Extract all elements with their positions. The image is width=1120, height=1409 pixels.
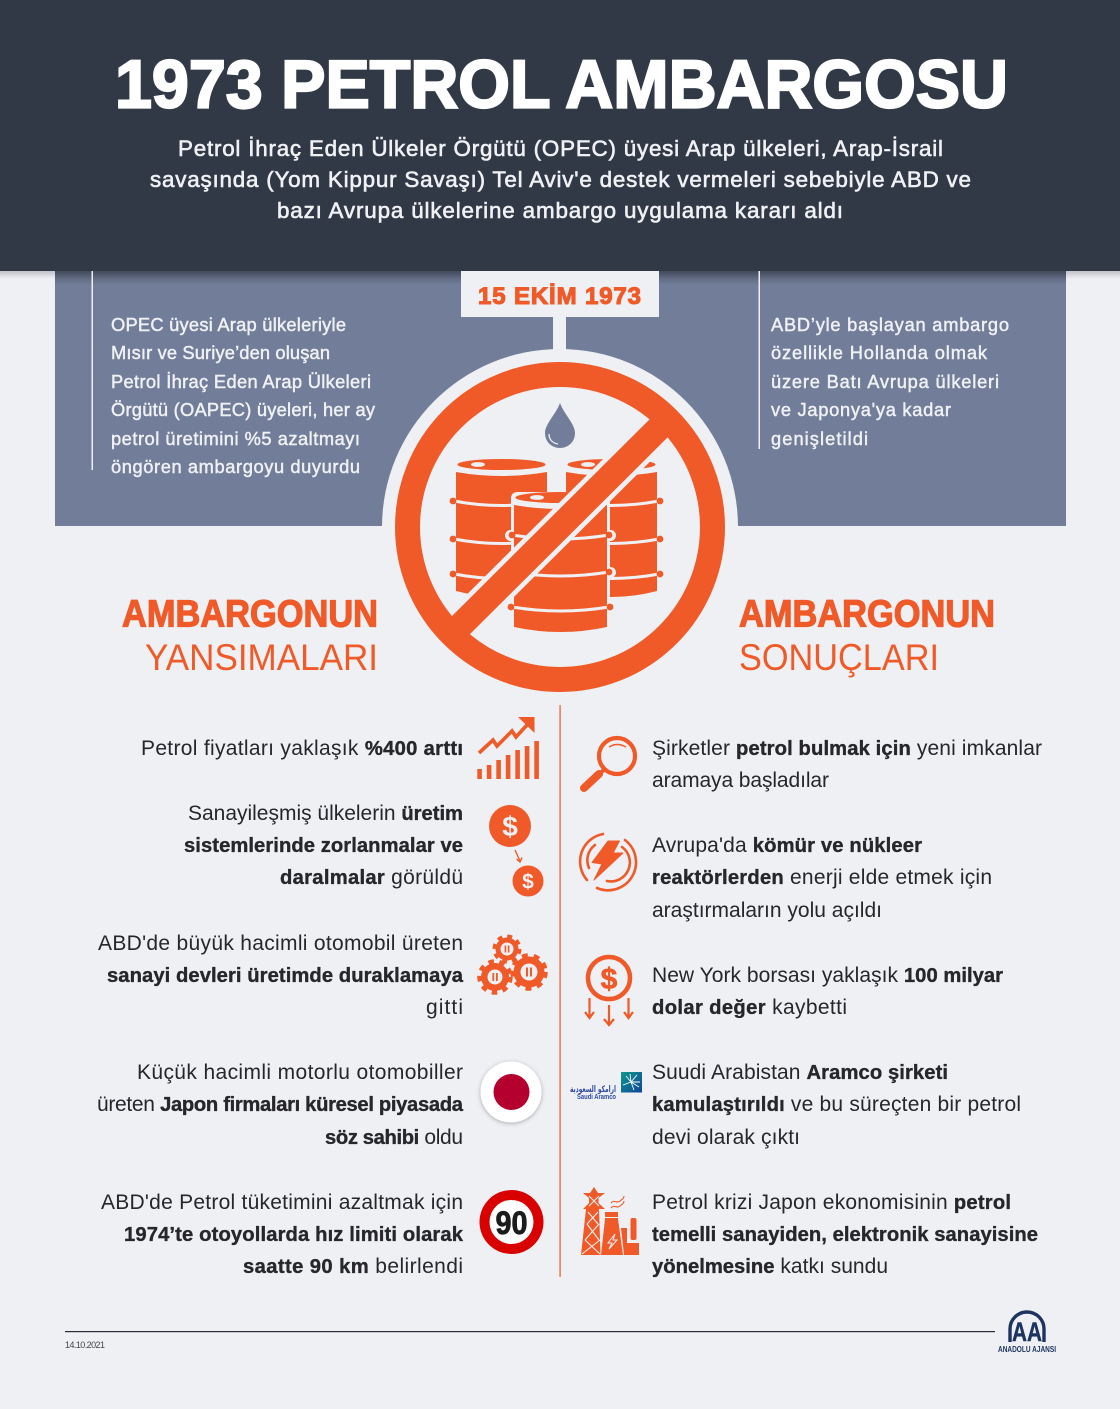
icon: paused gears [480, 937, 545, 992]
left intro text block: Örgütü (OAPEC) üyeleri, her ay [111, 399, 376, 420]
left intro text block: OPEC üyesi Arap ülkeleriyle [111, 314, 346, 335]
left column text: saatte 90 km belirlendi [243, 1255, 463, 1278]
logo: Saudi Aramco [570, 1072, 642, 1101]
right column text: reaktörlerden enerji elde etmek için [652, 866, 992, 889]
prohibition sign [408, 374, 712, 680]
right column text: Şirketler petrol bulmak için yeni imkanlar [652, 737, 1042, 760]
right intro text block: özellikle Hollanda olmak [771, 342, 988, 363]
icon: dollar with falling arrows [585, 957, 633, 1025]
right column text: kamulaştırıldı ve bu süreçten bir petrol [652, 1093, 1021, 1116]
icon: oil drop [545, 403, 575, 448]
left column text: 1974’te otoyollarda hız limiti olarak [124, 1224, 464, 1246]
left intro text block [92, 271, 376, 477]
icon: Japan flag [480, 1062, 542, 1122]
barrel: right [564, 459, 663, 597]
icon: 90 km speed limit: 90 [496, 1205, 528, 1241]
header description: Petrol İhraç Eden Ülkeler Örgütü (OPEC) üyesi Arap ülkeleri, Arap-İsrail [178, 136, 943, 161]
heading: results: AMBARGONUN [739, 594, 995, 636]
heading: results: SONUÇLARI [739, 637, 939, 678]
left column text: ABD'de Petrol tüketimini azaltmak için [101, 1191, 463, 1214]
icon: banned oil barrels [408, 374, 712, 680]
right column text: New York borsası yaklaşık 100 milyar [652, 964, 1003, 987]
right intro text block: üzere Batı Avrupa ülkeleri [771, 371, 999, 392]
right column text: araştırmaların yolu açıldı [652, 899, 882, 922]
right column text: temelli sanayiden, elektronik sanayisine [652, 1224, 1038, 1246]
right column text: dolar değer kaybetti [652, 996, 847, 1019]
right intro text block [758, 271, 1009, 449]
date: 14.10.2021 [65, 1340, 105, 1350]
header description [150, 136, 971, 223]
icon: dollar with falling arrows: $ [601, 963, 618, 996]
icon: 90 km speed limit [480, 1190, 544, 1254]
right intro text block: ABD’yle başlayan ambargo [771, 314, 1009, 335]
logo: Anadolu Ajansı [998, 1312, 1056, 1354]
heading: reflections: AMBARGONUN [122, 594, 378, 636]
barrel: left [450, 459, 549, 597]
logo: Saudi Aramco: Saudi Aramco [577, 1094, 616, 1101]
icon: falling dollar [489, 805, 544, 896]
icon: power plant [581, 1187, 639, 1255]
header description: bazı Avrupa ülkelerine ambargo uygulama kararı aldı [277, 198, 843, 223]
right intro text block: ve Japonya'ya kadar [771, 399, 951, 420]
heading: reflections [122, 594, 378, 678]
heading: reflections: YANSIMALARI [145, 637, 378, 678]
left intro text block: petrol üretimini %5 azaltmayı [111, 428, 360, 449]
left column text: sanayi devleri üretimde duraklamaya [107, 965, 464, 987]
left intro text block: öngören ambargoyu duyurdu [111, 456, 360, 477]
panel: upper grey-blue band [0, 271, 1120, 526]
icon: energy bolt [580, 834, 636, 890]
date label: 15 EKİM 1973 [478, 283, 641, 310]
header panel [0, 0, 1120, 271]
footer [65, 1312, 1056, 1354]
central circle halo and stem [382, 316, 738, 527]
logo: Anadolu Ajansı: AA [1012, 1317, 1042, 1347]
barrel: front [505, 492, 616, 634]
left column text: Sanayileşmiş ülkelerin üretim [188, 802, 463, 825]
right column text: yönelmesine katkı sundu [652, 1255, 888, 1278]
logo: Anadolu Ajansı: ANADOLU AJANSI [998, 1344, 1056, 1354]
left intro text block: Petrol İhraç Eden Arap Ülkeleri [111, 371, 371, 392]
right column text: Suudi Arabistan Aramco şirketi [652, 1061, 948, 1084]
heading: results [739, 594, 995, 678]
title: 1973 PETROL AMBARGOSU [115, 46, 1008, 122]
left column text: üreten Japon firmaları küresel piyasada [97, 1093, 464, 1116]
date label [461, 271, 659, 317]
logo: Saudi Aramco: ارامكو السعودية [570, 1085, 616, 1095]
icon: rising chart [477, 717, 539, 779]
left column text: gitti [426, 996, 463, 1019]
right column text [652, 737, 1042, 1278]
left column text: Petrol fiyatları yaklaşık %400 arttı [141, 737, 463, 760]
left intro text block: Mısır ve Suriye’den oluşan [111, 342, 330, 363]
right column text: Avrupa'da kömür ve nükleer [652, 834, 922, 857]
left column text: Küçük hacimli motorlu otomobiller [137, 1061, 463, 1084]
left column text: daralmalar görüldü [280, 866, 463, 889]
left column text: sistemlerinde zorlanmalar ve [184, 835, 463, 857]
center divider [559, 705, 561, 1277]
left column text [97, 737, 464, 1278]
right column text: aramaya başladılar [652, 769, 829, 792]
icon: magnifier [584, 738, 635, 788]
icon: falling dollar: $ [502, 811, 518, 842]
right column text: Petrol krizi Japon ekonomisinin petrol [652, 1191, 1011, 1214]
right column text: devi olarak çıktı [652, 1126, 800, 1149]
header description: savaşında (Yom Kippur Savaşı) Tel Aviv'e destek vermeleri sebebiyle ABD ve [150, 167, 971, 192]
icon: falling dollar: $ [522, 870, 534, 894]
left column text: ABD'de büyük hacimli otomobil üreten [98, 932, 463, 955]
left column text: söz sahibi oldu [325, 1126, 463, 1149]
right intro text block: genişletildi [771, 428, 868, 449]
